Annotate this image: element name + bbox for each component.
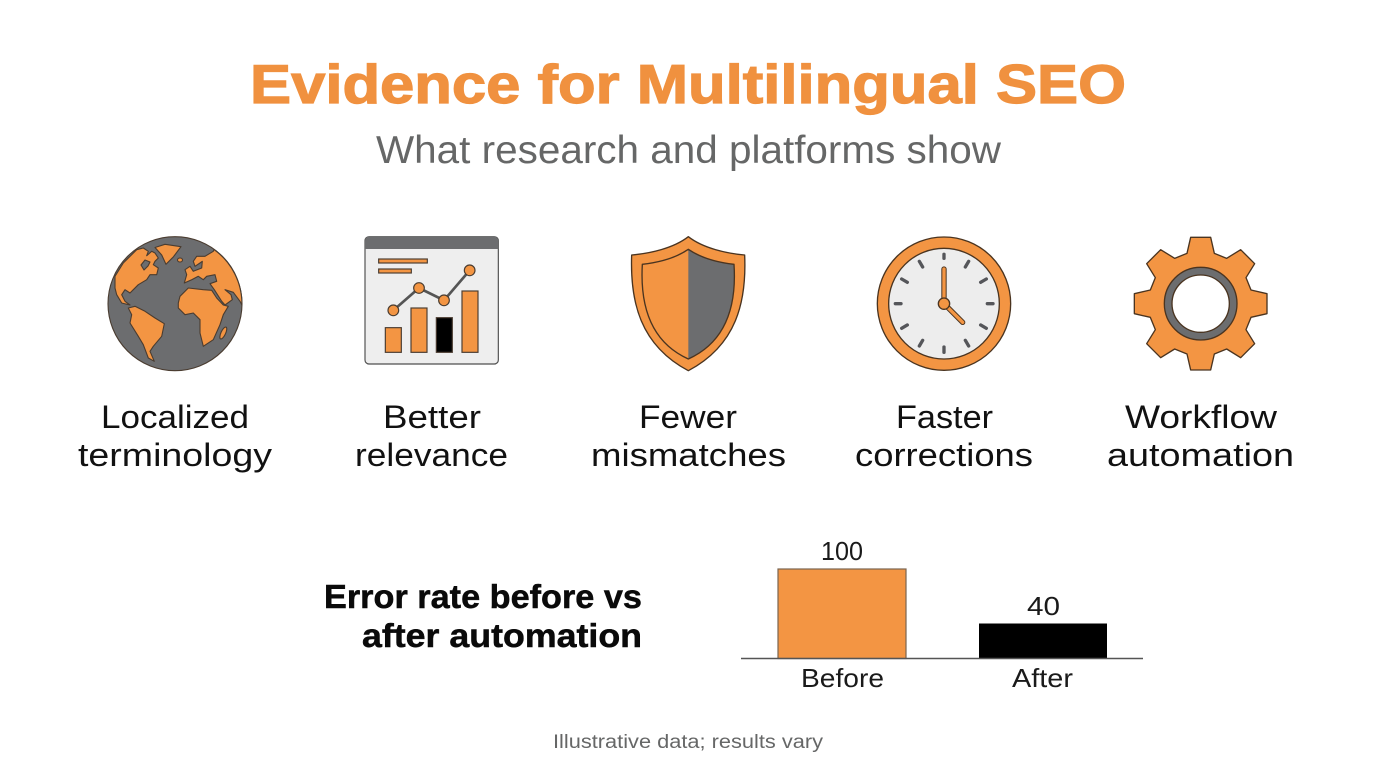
label: faster corrections [855,399,1033,473]
value: 100: 100 [821,536,863,566]
icon: shield [631,237,745,371]
label: faster corrections: Faster [896,399,993,435]
axis label: before: Before [801,663,884,693]
bar: before 100 [778,569,906,658]
subtitle: What research and platforms show [376,129,1002,172]
label: better relevance: relevance [355,437,508,473]
icon: clock [877,237,1011,370]
chart heading [324,578,642,654]
icon: gear [1134,237,1267,370]
axis label: after: After [1012,663,1073,693]
label: workflow automation: Workflow [1125,399,1278,435]
icon: globe [108,237,242,371]
label: workflow automation [1107,399,1294,473]
bar chart: error rate before vs after [741,536,1143,693]
bar: after 40 [979,624,1107,658]
label: workflow automation: automation [1107,437,1294,473]
chart heading: after automation [362,617,642,654]
label: localized terminology: terminology [78,437,272,473]
label: fewer mismatches: Fewer [639,399,737,435]
value: 40: 40 [1027,591,1060,621]
label: better relevance: Better [383,399,481,435]
footnote: Illustrative data; results vary [553,732,824,753]
label: fewer mismatches: mismatches [591,437,786,473]
label: localized terminology [78,399,272,473]
label: better relevance [355,399,508,473]
label: localized terminology: Localized [101,399,249,435]
label: fewer mismatches [591,399,786,473]
chart heading: Error rate before vs [324,578,642,615]
label: faster corrections: corrections [855,437,1033,473]
title: Evidence for Multilingual SEO [250,53,1126,115]
icon: analytics dashboard [365,237,498,364]
